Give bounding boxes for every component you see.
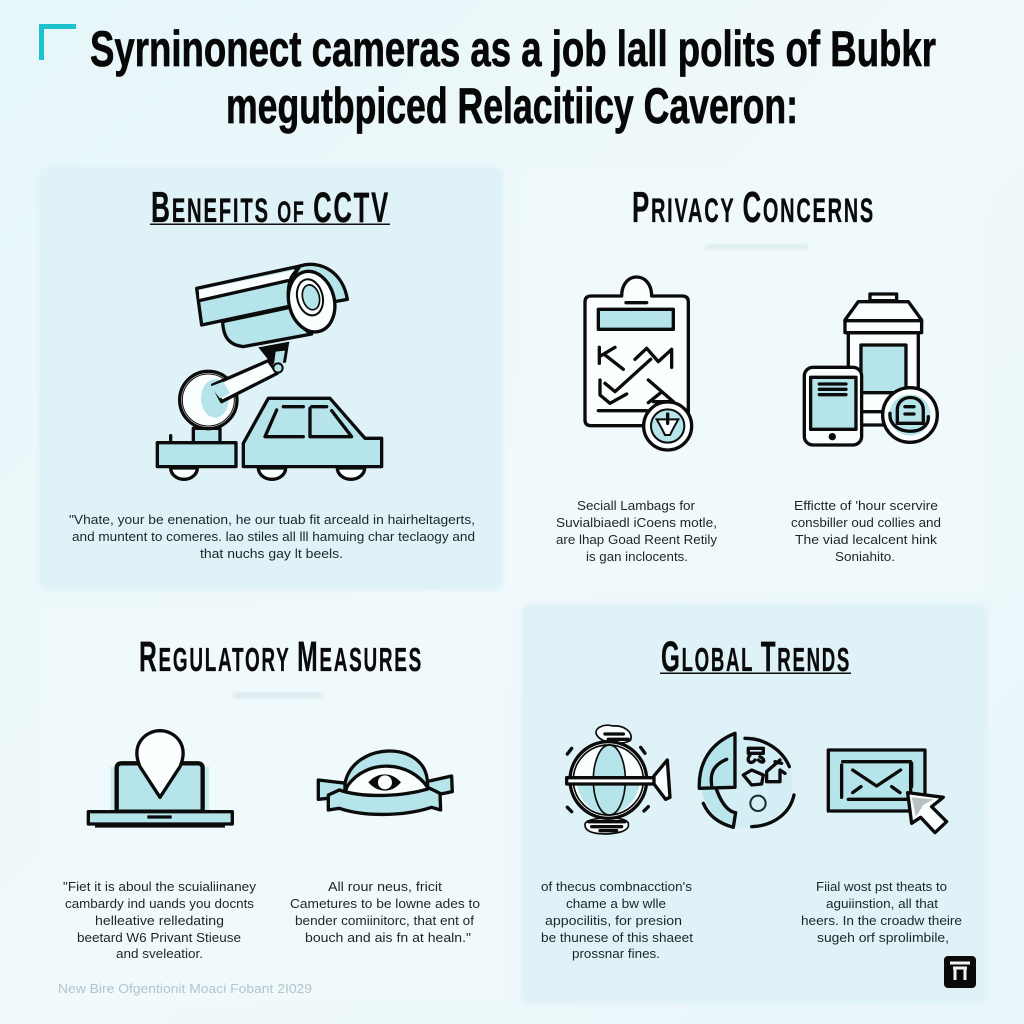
text: regulatory left column: helleative relledating xyxy=(95,913,224,928)
text: privacy left column: Seciall Lambags for xyxy=(577,498,696,513)
panel: privacy concerns xyxy=(522,170,986,592)
text: benefits quote xyxy=(69,512,475,561)
text: trends right column: Fiial wost pst theats to xyxy=(816,879,947,894)
text: privacy right column: consbiller oud collies and xyxy=(791,515,941,530)
text: regulatory left column: and sveleatior. xyxy=(116,946,203,961)
heading: privacy concerns: PRIVACY CONCERNS xyxy=(632,183,875,232)
text: regulatory right column xyxy=(290,879,480,945)
faint smudge under heading xyxy=(705,244,808,250)
panel: global trends xyxy=(522,604,987,1003)
text: benefits quote: that nuchs gay lt beels. xyxy=(200,546,343,561)
text: regulatory left column: "Fiet it is aboul the scuialiinaney xyxy=(63,879,257,894)
icon: device stack with lock xyxy=(804,294,937,445)
text: trends right column xyxy=(801,879,962,945)
text: trends left column: of thecus combnacction's xyxy=(541,879,693,894)
text: regulatory left column: cambardy ind uands you docnts xyxy=(65,896,255,911)
icon: security camera and car xyxy=(157,264,382,479)
icon: globe with megaphone xyxy=(567,725,670,834)
footer note: New Bire Ofgentionit Moaci Fobant 2I029 xyxy=(58,981,312,996)
faint smudge under heading xyxy=(233,692,323,699)
text: privacy right column: The viad lecalcent hink xyxy=(795,532,938,547)
icon: envelope with cursor xyxy=(828,750,947,833)
panel: benefits of CCTV xyxy=(39,167,503,590)
text: privacy left column: Suvialbiaedl iCoens motle, xyxy=(556,515,717,530)
text: trends left column: chame a bw wlle xyxy=(566,896,666,911)
text: privacy left column: are lhap Goad Reent Retily xyxy=(556,532,718,547)
text: regulatory left column: beetard W6 Privant Stieuse xyxy=(77,930,241,945)
text: regulatory right column: Cametures to be lowne ades to xyxy=(290,896,480,911)
text: trends right column: aguiinstion, all that xyxy=(826,896,938,911)
icon: laptop with location pin xyxy=(88,731,232,828)
text: privacy right column: Effictte of 'hour scervire xyxy=(794,498,938,513)
text: trends left column: be thunese of this shaeet xyxy=(541,930,693,945)
heading: regulatory measures: REGULATORY MEASURES xyxy=(139,633,423,681)
logo badge xyxy=(944,956,976,988)
text: privacy right column: Soniahito. xyxy=(835,549,895,564)
text: regulatory right column: All rour neus, fricit xyxy=(328,879,442,894)
icon: masked eye helmet xyxy=(318,751,452,814)
icon: radial segments chart xyxy=(699,733,794,828)
text: benefits quote: and muntent to comeres. lao stiles all lll hamuing char teclaogy and xyxy=(72,529,475,544)
title: megutbpiced Relacitiicy Caveron: xyxy=(226,78,798,134)
text: trends left column: prossnar fines. xyxy=(572,946,660,961)
heading: global trends: GLOBAL TRENDS xyxy=(661,633,851,681)
title xyxy=(90,21,936,134)
text: benefits quote: "Vhate, your be enenation, he our tuab fit arceald in hairheltagerts, xyxy=(69,512,475,527)
text: trends left column xyxy=(541,879,693,961)
heading: benefits of CCTV: BENEFITS OF CCTV xyxy=(151,183,390,232)
text: trends right column: heers. In the croadw theire xyxy=(801,913,962,928)
panel: regulatory measures xyxy=(40,606,505,1003)
corner bracket accent xyxy=(42,26,76,60)
text: regulatory right column: bouch and ais fn at healn." xyxy=(305,930,471,945)
text: privacy left column xyxy=(556,498,718,564)
icon: clipboard checklist xyxy=(585,277,692,450)
text: trends right column: sugeh orf sprolimbile, xyxy=(817,930,949,945)
text: privacy left column: is gan inclocents. xyxy=(586,549,688,564)
text: privacy right column xyxy=(791,498,941,564)
text: regulatory left column xyxy=(63,879,257,961)
text: regulatory right column: bender comiinitorc, that ent of xyxy=(295,913,474,928)
text: trends left column: appocilitis, for presion xyxy=(545,913,682,928)
